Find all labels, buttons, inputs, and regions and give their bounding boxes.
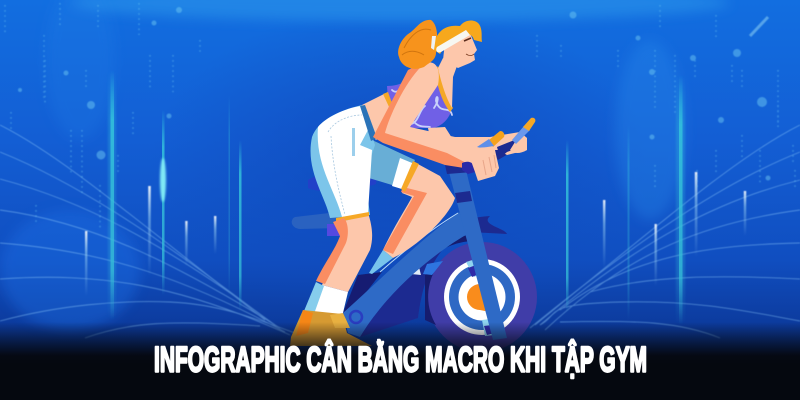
face — [443, 33, 477, 68]
shoe — [290, 310, 372, 346]
background: dotted data columns and glow dots — [5, 3, 800, 230]
far shorts — [360, 140, 415, 188]
far leg — [383, 163, 455, 258]
bike seat — [308, 172, 377, 191]
sock — [313, 285, 348, 317]
bike seat post rear bar — [292, 212, 338, 229]
background: curved light lines left — [0, 125, 300, 338]
front fingers — [510, 134, 527, 153]
cyclist — [290, 20, 535, 346]
dark panel under frame — [343, 272, 382, 313]
background: curved light lines right — [530, 125, 800, 338]
hair bun — [398, 20, 437, 69]
neck and chest — [438, 58, 457, 108]
top pattern — [392, 85, 452, 127]
near hand grip end — [462, 162, 475, 174]
front grip — [512, 126, 530, 144]
headband — [436, 30, 470, 53]
main frame — [343, 212, 471, 337]
front stem — [449, 170, 507, 340]
flywheel — [425, 242, 537, 352]
bicycle — [292, 140, 537, 352]
lower midriff — [428, 127, 452, 138]
top — [387, 66, 452, 128]
far sock — [369, 250, 393, 274]
hand — [470, 147, 499, 181]
waist — [362, 92, 400, 140]
bottom fade to black — [0, 322, 800, 364]
bottom black band — [0, 364, 800, 400]
near hips — [311, 105, 375, 218]
top trim — [435, 66, 453, 112]
far handlebar — [497, 139, 518, 158]
upper arm — [385, 62, 478, 168]
handlebars — [445, 160, 473, 174]
near leg — [322, 216, 372, 292]
background: glowing vertical bars — [85, 70, 746, 325]
pedal loop — [350, 311, 362, 323]
far grip — [489, 131, 504, 147]
arm shadow — [373, 64, 477, 170]
small highlight wedge — [411, 267, 421, 275]
hair front — [434, 20, 482, 54]
wheel guard — [360, 216, 507, 337]
rear purple block — [327, 224, 341, 236]
far arm — [450, 132, 527, 155]
